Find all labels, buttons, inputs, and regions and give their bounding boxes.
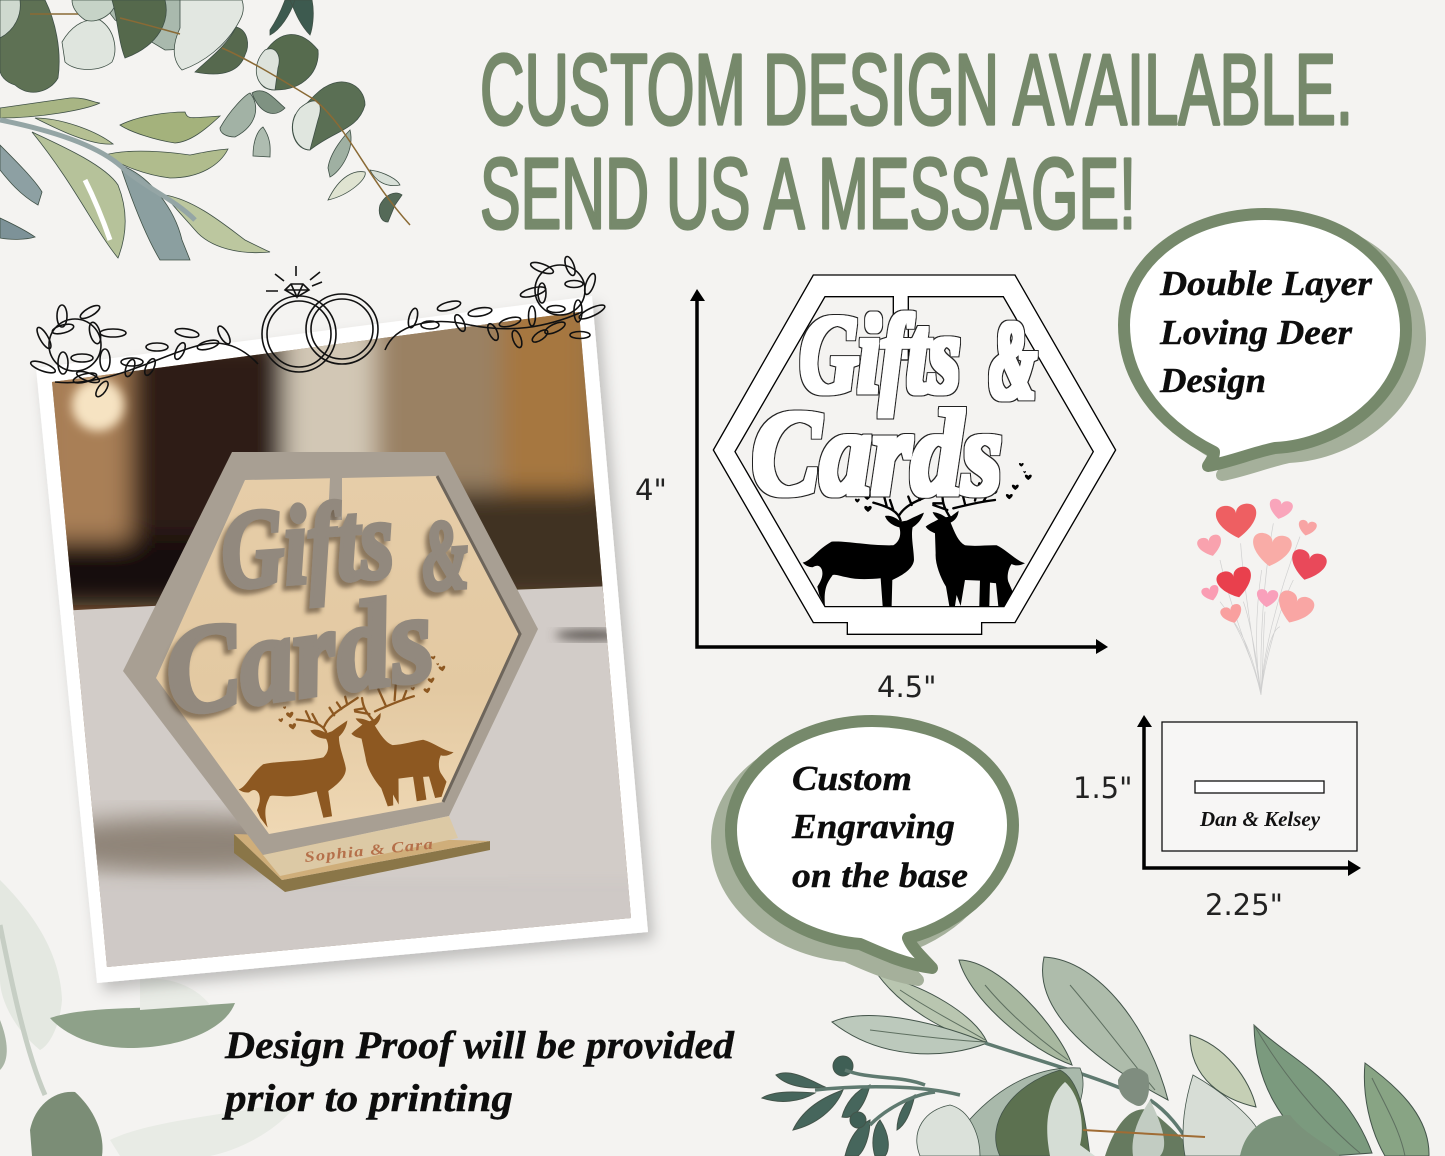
title	[480, 34, 1353, 250]
foliage: bottom-right	[762, 957, 1429, 1156]
dimension label: 4.5 in: 4.5"	[877, 670, 936, 704]
design proof note: prior to printing	[222, 1077, 513, 1120]
bubble text: Design	[1159, 361, 1266, 400]
design proof note	[222, 1024, 735, 1120]
bubble text: Double Layer	[1159, 264, 1372, 303]
script lettering: Cards	[752, 386, 1002, 521]
photo: wooden hexagon sign	[123, 452, 538, 892]
base rectangle	[1162, 722, 1357, 851]
bubble text: Custom	[792, 759, 912, 798]
bubble text: on the base	[792, 856, 968, 895]
dimension label: 4 in: 4"	[635, 473, 667, 507]
photo: engraved name on base: Sophia & Cara	[304, 836, 435, 866]
icon: interlocked rings	[262, 266, 378, 372]
dimension label: 1.5 in: 1.5"	[1073, 771, 1132, 805]
foliage: top-left	[0, 0, 410, 260]
bubble text	[791, 759, 968, 895]
photo: raised lettering: Gifts	[217, 477, 397, 613]
slot	[1195, 781, 1324, 793]
photo: raised lettering: Cards	[157, 569, 441, 743]
speech bubble: double layer	[1124, 214, 1420, 475]
vine: right	[385, 255, 606, 350]
vine: left	[29, 303, 258, 399]
bubble text: Loving Deer	[1159, 313, 1352, 352]
wedding rings and vine ornament	[29, 255, 606, 399]
hexagon outline	[713, 275, 1116, 634]
foliage: bottom-left	[0, 880, 300, 1156]
base dimension diagram	[1137, 715, 1361, 876]
product dimension diagram	[690, 275, 1116, 654]
axis arrows	[1137, 715, 1361, 876]
dimension label: 2.25 in: 2.25"	[1205, 888, 1283, 922]
balloon strings	[1220, 523, 1300, 695]
photo: raised lettering	[157, 477, 471, 743]
photo: engraved deer	[222, 654, 467, 831]
axis arrows	[690, 289, 1108, 654]
bubble text	[1159, 264, 1372, 400]
heart balloon bouquet	[1196, 498, 1328, 695]
script lettering: &	[990, 299, 1036, 423]
bubble text: Engraving	[791, 807, 955, 846]
polaroid photo of the product	[20, 296, 660, 990]
engraved name: Dan & Kelsey	[1199, 807, 1321, 831]
photo: raised lettering: &	[418, 498, 471, 612]
script lettering	[752, 293, 1036, 521]
script lettering: Gifts	[800, 293, 960, 417]
speech bubble: custom engraving	[717, 721, 1013, 980]
design proof note: Design Proof will be provided	[224, 1024, 735, 1067]
